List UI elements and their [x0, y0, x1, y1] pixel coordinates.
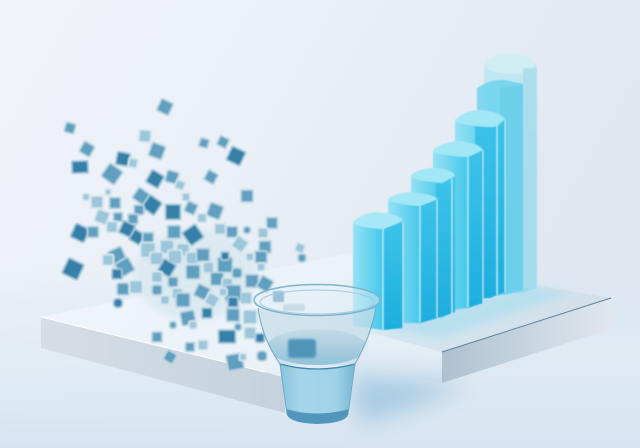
bar chart: [353, 54, 537, 330]
platform slab: [41, 253, 611, 425]
pale haze behind cubes: [135, 230, 255, 320]
water surface: [267, 329, 367, 365]
bar 5: [455, 110, 505, 300]
cup rim: [254, 284, 380, 316]
bar 3: [411, 168, 455, 320]
bar 4: [433, 141, 483, 312]
slab right side face: [442, 298, 611, 383]
scattered cubes: [62, 98, 306, 371]
cup outline: [258, 308, 376, 414]
bar 2: [388, 192, 438, 323]
cyan reflection under the bars: [385, 286, 570, 338]
cup upper glass: [258, 308, 376, 365]
cup lower body: [280, 364, 355, 418]
bar 7: [484, 54, 537, 293]
slab left side face: [41, 317, 285, 413]
cubes seen through the cup rim: [273, 291, 305, 311]
cup base: [286, 409, 349, 424]
slab top surface: [41, 253, 611, 382]
bar 6: [477, 80, 523, 296]
bar 1: [353, 212, 403, 330]
cube in water: [288, 339, 316, 358]
glass cup: [254, 284, 380, 424]
slab front side face: [365, 333, 442, 383]
cup shadow on the floor: [350, 375, 470, 425]
